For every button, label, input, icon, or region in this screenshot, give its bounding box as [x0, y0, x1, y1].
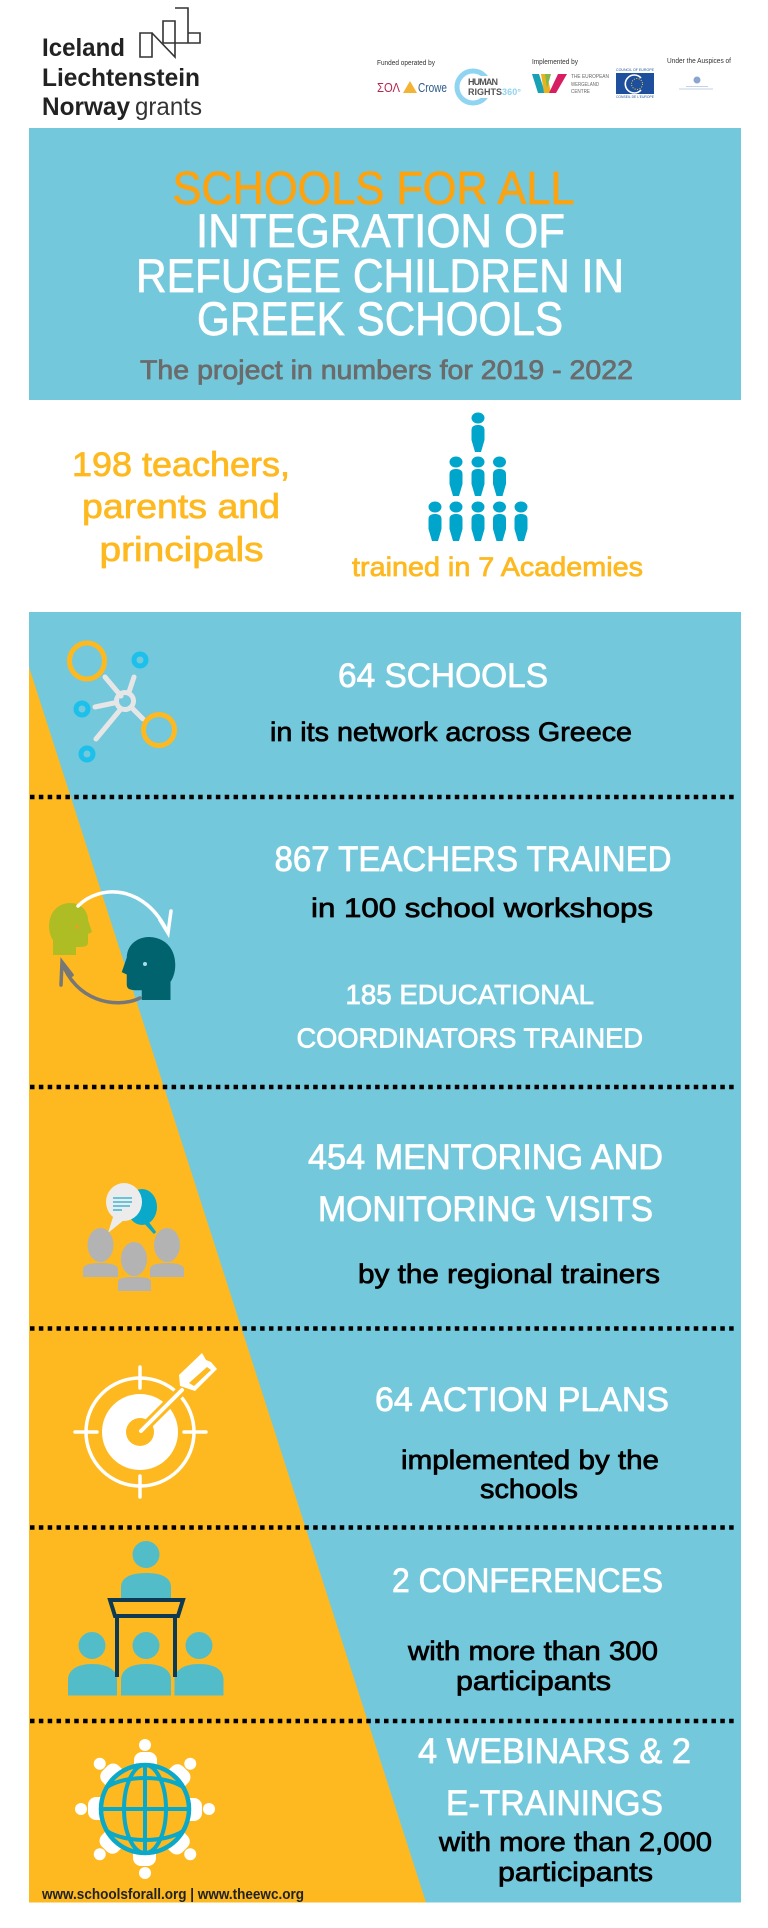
under the auspices of	[667, 58, 731, 90]
logo: Iceland Liechtenstein Norway grants: grants	[135, 93, 202, 121]
section: teachers trained	[49, 840, 672, 1054]
subtitle: The project in numbers for 2019 - 2022	[140, 355, 633, 385]
text: trained in 7 academies: trained in 7 Academies	[352, 552, 643, 582]
section: webinars and e-trainings	[75, 1732, 712, 1887]
icon: target with arrow	[75, 1353, 217, 1497]
heading: educational coordinators: COORDINATORS TRAINED	[296, 1022, 643, 1054]
funded operated by: ΣΟΛ	[377, 80, 400, 95]
partner logos	[377, 58, 731, 103]
implemented by: Wergeland Centre: WERGELAND	[571, 82, 599, 88]
section: mentoring visits	[83, 1138, 663, 1291]
description	[407, 1636, 658, 1696]
description: implemented by the	[401, 1445, 659, 1475]
heading: MONITORING VISITS	[318, 1190, 653, 1229]
Human Rights 360 logo	[457, 71, 521, 103]
heading: educational coordinators	[296, 979, 643, 1054]
text: 198 teachers, parents and principals: parents and	[82, 488, 280, 526]
panel: statistics background	[29, 612, 741, 1902]
under the auspices of: Under the Auspices of	[667, 58, 731, 65]
logo: Iceland Liechtenstein Norway grants: Iceland	[42, 34, 125, 62]
implemented by: Wergeland Centre: THE EUROPEAN	[571, 74, 609, 80]
title: integration of refugee children in greek schools: INTEGRATION OF	[196, 204, 565, 257]
logo: Iceland Liechtenstein Norway grants: Norway	[42, 93, 130, 121]
description: participants	[498, 1857, 653, 1887]
heading	[418, 1732, 691, 1823]
Council of Europe logo: COUNCIL OF EUROPE	[616, 68, 655, 72]
footer: website links: www.schoolsforall.org | www.theewc.org	[41, 1886, 304, 1903]
icon: pyramid of people	[428, 412, 528, 541]
heading: 2 CONFERENCES	[392, 1562, 663, 1600]
description: with more than 2,000	[438, 1827, 712, 1857]
panel: title banner	[29, 128, 741, 400]
description: by the regional trainers	[358, 1259, 660, 1289]
heading: 867 teachers trained: 867 TEACHERS TRAINED	[274, 840, 672, 879]
description	[401, 1445, 659, 1504]
title: integration of refugee children in greek schools: REFUGEE CHILDREN IN	[136, 249, 624, 302]
heading: E-TRAININGS	[446, 1784, 663, 1823]
heading: 64 ACTION PLANS	[375, 1381, 669, 1419]
description	[438, 1827, 712, 1887]
funded operated by: Funded operated by	[377, 60, 435, 67]
icon: group with speech bubbles	[83, 1183, 184, 1291]
Human Rights 360 logo: 360°	[502, 87, 521, 97]
section: 64 schools	[70, 643, 632, 760]
text: 198 teachers, parents and principals: principals	[100, 531, 264, 569]
Council of Europe logo: CONSEIL DE L'EUROPE	[616, 95, 655, 99]
description: in its network across Greece	[270, 717, 632, 747]
heading: 64 SCHOOLS	[338, 657, 548, 695]
heading: 4 WEBINARS & 2	[418, 1732, 691, 1771]
description: with more than 300	[407, 1636, 658, 1666]
Council of Europe logo	[616, 68, 655, 99]
section: action plans	[75, 1353, 669, 1504]
description: workshops: in 100 school workshops	[311, 893, 653, 923]
description: schools	[480, 1474, 578, 1504]
heading	[308, 1138, 663, 1229]
implemented by: Wergeland Centre: Implemented by	[532, 59, 578, 66]
icon: globe with people around it	[75, 1739, 215, 1879]
title: integration of refugee children in greek schools: GREEK SCHOOLS	[197, 292, 563, 345]
logo: Iceland Liechtenstein Norway grants: Liechtenstein	[42, 64, 200, 92]
description: participants	[456, 1666, 611, 1696]
Human Rights 360 logo: HUMAN	[468, 77, 498, 87]
title: integration of refugee children in greek schools	[136, 204, 624, 345]
icon: speaker at podium with audience	[68, 1541, 224, 1696]
funded operated by	[377, 60, 447, 95]
title: schools for all: SCHOOLS FOR ALL	[172, 162, 574, 214]
text: 198 teachers, parents and principals	[72, 446, 290, 569]
heading: educational coordinators: 185 EDUCATIONAL	[346, 979, 594, 1010]
heading: 454 MENTORING AND	[308, 1138, 663, 1177]
funded operated by: Crowe	[418, 80, 447, 95]
Human Rights 360 logo: RIGHTS	[468, 87, 502, 97]
implemented by: Wergeland Centre: CENTRE	[571, 89, 590, 95]
icon: two heads with exchange arrows	[49, 892, 175, 1003]
logo: Iceland Liechtenstein Norway grants	[42, 8, 202, 121]
implemented by: Wergeland Centre	[532, 59, 609, 95]
section: conferences	[68, 1541, 663, 1696]
icon: network	[70, 643, 174, 760]
text: 198 teachers, parents and principals: 198 teachers,	[72, 446, 290, 484]
